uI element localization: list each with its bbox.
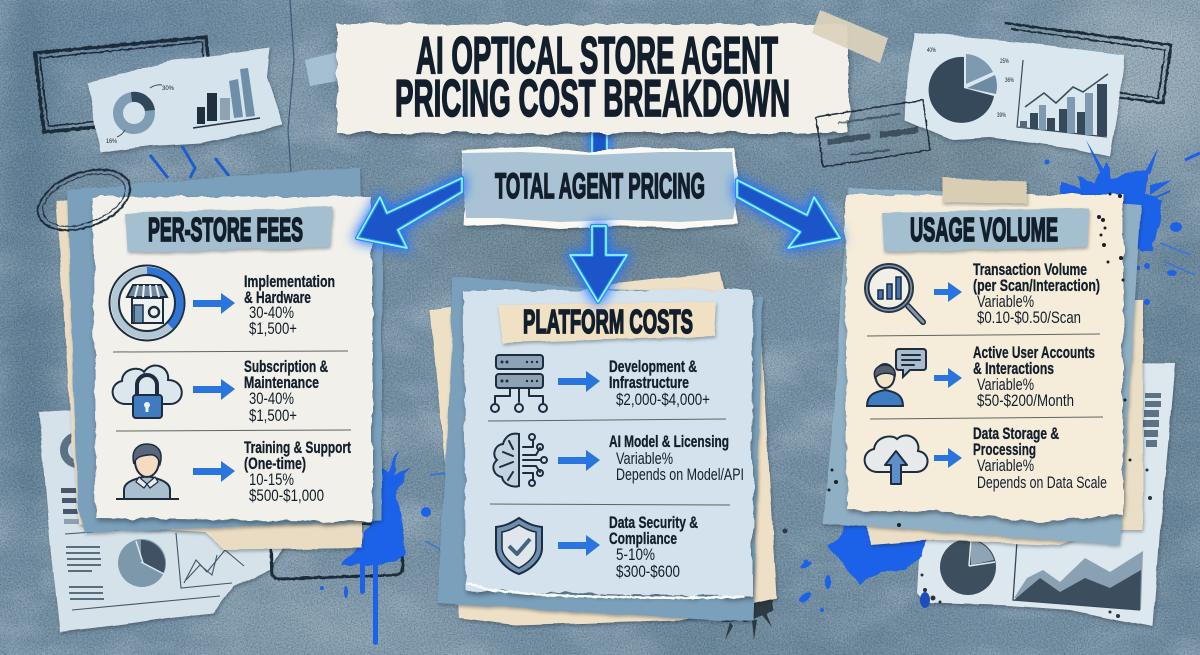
decorative paper: top right pie and bars: 36%: [1005, 78, 1014, 84]
cream back sheet: [430, 272, 777, 625]
icon: brain circuit: [493, 434, 547, 487]
decorative paper: top right pie and bars: [905, 32, 1125, 157]
cream front sheet: [845, 195, 1123, 522]
text: $2,000-$4,000+: [616, 391, 710, 409]
icon: server network: [491, 355, 547, 412]
heading: USAGE VOLUME: [910, 211, 1058, 248]
donut chart: [118, 92, 155, 129]
text: Variable%: [977, 457, 1034, 475]
text: (per Scan/Interaction): [973, 277, 1100, 295]
blue back sheet: [437, 276, 763, 622]
text: $300-$600: [616, 563, 680, 581]
white front sheet: [93, 197, 372, 522]
text: Data Storage &: [973, 425, 1059, 443]
text: $500-$1,000: [249, 487, 324, 505]
pie chart: [118, 539, 166, 587]
line chart: [65, 530, 244, 610]
row: AI model and licensing: [493, 433, 744, 487]
icon: person: [116, 444, 179, 499]
decorative paper: top right pie and bars: 40%: [927, 48, 936, 54]
neon arrow: down to platform costs: [570, 226, 627, 302]
donut fragment: [64, 436, 92, 464]
white torn rim along sheet bottom: [467, 583, 745, 598]
decorative paper: bottom left report: [39, 408, 300, 632]
text: [973, 344, 1095, 410]
arrow: [193, 461, 235, 482]
text: $0.10-$0.50/Scan: [977, 309, 1081, 327]
arrow: [558, 450, 600, 471]
text: Transaction Volume: [973, 261, 1087, 279]
neon arrow: from title to total agent pricing: [589, 130, 610, 154]
blue back sheet: [67, 167, 382, 533]
icon: shield with check: [496, 518, 542, 574]
text: [973, 425, 1107, 492]
heading: PER-STORE FEES: [148, 211, 303, 248]
blue back sheet: [823, 188, 1141, 545]
text: Maintenance: [244, 374, 319, 392]
text: Active User Accounts: [973, 344, 1095, 362]
row: data storage: [865, 425, 1107, 492]
pie chart: [940, 539, 996, 595]
text: $50-$200/Month: [977, 392, 1074, 410]
text: Training & Support: [244, 439, 351, 457]
text: Variable%: [977, 376, 1034, 394]
row: transaction volume: [865, 261, 1100, 327]
bar and line chart: [1017, 60, 1108, 137]
text: 5-10%: [616, 546, 655, 564]
panel: per-store fees: [56, 167, 382, 550]
row: implementation and hardware: [110, 266, 335, 340]
stamp: bottom left: [270, 523, 403, 579]
title tape: left: [305, 45, 370, 86]
heading tape: [882, 208, 1089, 252]
decorative paper: bottom right report: [917, 362, 1175, 627]
text: Processing: [973, 441, 1036, 459]
bar chart: [193, 68, 260, 128]
row: subscription and maintenance: [113, 358, 328, 425]
panel: usage volume: [823, 178, 1143, 545]
arrow: [193, 293, 235, 314]
arrow: [193, 379, 235, 400]
row: active user accounts: [867, 344, 1095, 410]
text: (One-time): [244, 455, 306, 473]
text: AI Model & Licensing: [609, 433, 729, 451]
pie chart: [929, 54, 997, 123]
text: Data Security &: [609, 514, 698, 532]
arrow: [934, 282, 962, 302]
row: data security and compliance: [496, 514, 698, 581]
text: 30-40%: [249, 390, 294, 408]
ink splat: bottom right blue: [798, 525, 930, 612]
label: TOTAL AGENT PRICING: [495, 167, 705, 206]
ink specks: [920, 468, 1152, 618]
title banner: [337, 24, 848, 133]
text: [244, 439, 351, 505]
decorative paper: top left donut and bars: [88, 48, 283, 153]
heading: PLATFORM COSTS: [523, 303, 693, 340]
stamp: top left rectangle: [35, 37, 214, 132]
side bars: [1143, 393, 1161, 447]
decorative paper: top left donut and bars: 30%: [162, 86, 175, 92]
report text lines: [61, 488, 104, 600]
text: Infrastructure: [609, 374, 689, 392]
light blue front sheet: [463, 290, 753, 597]
text: [609, 358, 710, 409]
title line two: PRICING COST BREAKDOWN: [395, 70, 790, 128]
icon: user with speech bubble: [867, 349, 926, 406]
stamp: centre right: [816, 100, 930, 167]
arrow: [934, 368, 962, 388]
arrow: [558, 535, 600, 556]
text: [973, 261, 1100, 327]
ink splat: dark bottom centre: [720, 528, 788, 640]
arrow: [558, 371, 600, 392]
title line one: AI OPTICAL STORE AGENT: [416, 27, 778, 85]
title tape: right: [812, 10, 888, 63]
icon: store in progress ring: [110, 266, 184, 340]
cream back sheets: [866, 300, 1143, 545]
heading tape: [498, 302, 716, 343]
oval stamp: [30, 158, 138, 242]
text: [244, 358, 328, 425]
text: & Interactions: [973, 360, 1054, 378]
text: [609, 514, 698, 581]
decorative paper: top right pie and bars: 39%: [997, 113, 1006, 119]
row: training and support: [116, 439, 351, 505]
text: 10-15%: [249, 471, 294, 489]
text: Implementation: [244, 273, 335, 291]
ink specks on usage panel: [828, 192, 1132, 527]
text: Subscription &: [244, 358, 328, 376]
text: Variable%: [616, 450, 673, 468]
ink splat: top right blue: [1044, 140, 1200, 305]
ink streaks under top left paper: [150, 146, 229, 178]
text: Compliance: [609, 530, 677, 548]
text: Depends on Model/API: [616, 466, 744, 484]
text: [244, 273, 335, 338]
area chart: [1013, 541, 1143, 610]
stamp: top right rectangle: [1005, 23, 1171, 103]
text: & Hardware: [244, 289, 311, 307]
text: [609, 433, 744, 484]
icon: magnifier with bars: [865, 264, 923, 322]
neon arrow: left to per-store fees: [357, 178, 462, 248]
neon arrow: right to usage volume: [737, 180, 840, 248]
scattered blue flecks centre: [421, 473, 812, 604]
icon: cloud with padlock: [113, 366, 182, 418]
text: Variable%: [977, 293, 1034, 311]
text: $1,500+: [249, 320, 297, 338]
total agent pricing banner: [461, 146, 738, 229]
tape on top: [943, 178, 1027, 204]
text: Depends on Data Scale: [977, 474, 1107, 492]
text: $1,500+: [249, 407, 297, 425]
decorative paper: top right pie and bars: 25%: [1000, 59, 1009, 65]
icon: cloud upload: [865, 436, 928, 484]
row: development and infrastructure: [491, 355, 710, 412]
ink splat: bottom left blue: [320, 450, 410, 645]
heading tape: [126, 207, 332, 252]
text: Development &: [609, 358, 697, 376]
text: 30-40%: [249, 304, 294, 322]
arrow: [934, 448, 962, 468]
panel: platform costs: [430, 272, 777, 625]
decorative paper: top left donut and bars: 16%: [106, 139, 118, 145]
cream back sheet: [56, 198, 362, 550]
